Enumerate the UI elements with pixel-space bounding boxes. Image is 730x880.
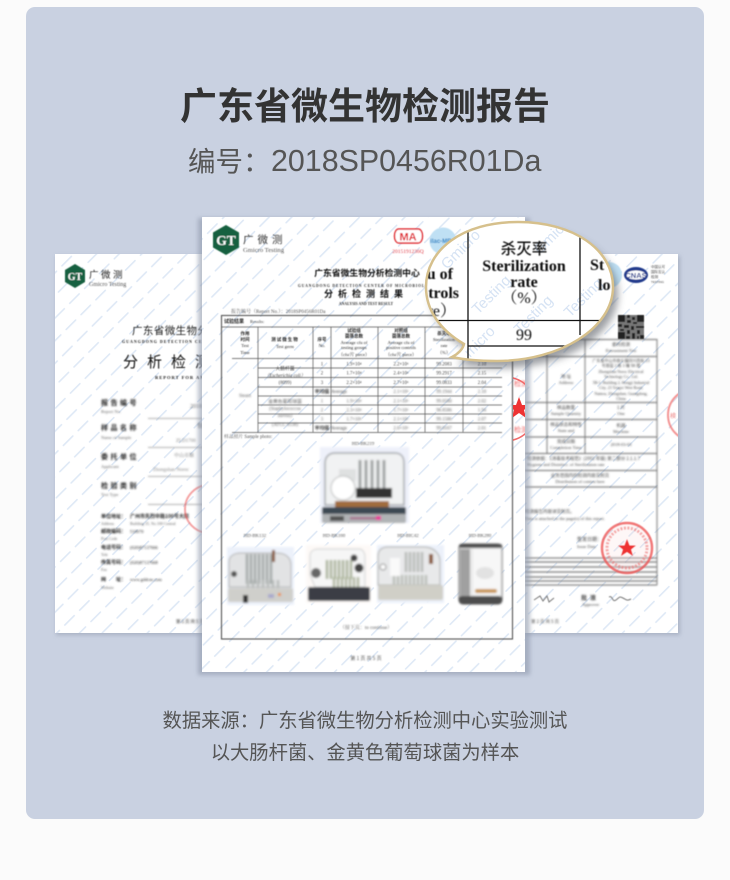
callout: magnified sterilization rate: micro bbox=[461, 323, 499, 361]
right page table: 广东省中山市南头镇同兴西街 23 bbox=[592, 357, 650, 364]
right page table: Address bbox=[559, 380, 574, 385]
report number: 报告编号（Report No.）：2018SP0456R01Da bbox=[231, 308, 326, 315]
report heading: GUANGDONG DETECTION CENTER OF MICROBIOLOGY bbox=[298, 284, 436, 288]
subtitle: report number: 编号： bbox=[188, 146, 270, 177]
results table: 作用 bbox=[240, 330, 250, 337]
left page form fields: 单位地址： bbox=[101, 513, 126, 520]
results table: 平均值 bbox=[315, 388, 329, 395]
results table: Sterilization bbox=[433, 337, 456, 342]
results table: 平均值 bbox=[315, 424, 329, 432]
callout: magnified sterilization rate: Testing bbox=[561, 275, 606, 321]
handwritten signatures bbox=[534, 596, 631, 602]
icon: left page logo: GT bbox=[68, 272, 83, 283]
left page form fields: 电话号码： bbox=[101, 544, 126, 551]
results table: 1.9×10⁴ bbox=[346, 362, 362, 368]
photo: dryer BK160 bbox=[306, 534, 371, 603]
left page form fields: 检验类别 bbox=[101, 481, 139, 491]
results table: （cfu/片 piece） bbox=[385, 351, 417, 358]
results table: 99.0167 bbox=[436, 426, 452, 432]
results table: 1.9×10⁴ bbox=[346, 398, 362, 404]
photo: main dish dryer: HD-BK219 bbox=[352, 442, 375, 447]
results table bbox=[222, 316, 512, 639]
left page form fields: 广州市先烈中路100号大院 bbox=[130, 513, 189, 520]
left page form fields: Zhongshan Noroc bbox=[153, 468, 190, 473]
right page table: 机器 bbox=[616, 422, 626, 429]
icon: CNAS badge: 中国认可 bbox=[651, 264, 665, 270]
results table: (Staphylococcus bbox=[269, 407, 301, 412]
left page form fields: Building 35, No.100 Central bbox=[130, 521, 177, 527]
right page table: 地 址 bbox=[561, 373, 572, 380]
results table: 3 bbox=[321, 381, 324, 386]
results table: 试验组 bbox=[347, 327, 361, 334]
results table: rate bbox=[441, 343, 447, 348]
left page logo text bbox=[89, 267, 126, 288]
photo: dryer BK160: HD-BK160 bbox=[323, 534, 346, 539]
results table: （%） bbox=[438, 350, 450, 355]
left page form fields: 样品名称 bbox=[101, 423, 139, 433]
right page table: 1 片 bbox=[617, 404, 625, 411]
results table: 时间 bbox=[240, 336, 250, 343]
photo: upright dryer BK280: HD-BK280 bbox=[469, 534, 492, 539]
results table: aureus) bbox=[278, 414, 293, 419]
results table: 1.7×10⁴ bbox=[346, 370, 362, 376]
right page table: State and bbox=[558, 428, 575, 433]
right page table: Hygiene and Disinfect. of Sterilization rate bbox=[527, 462, 604, 467]
logo text: Gmicro Testing bbox=[243, 247, 285, 254]
left page logo text: 广微测 bbox=[89, 267, 125, 281]
results table: Test germ bbox=[276, 344, 294, 349]
magnified neighbouring columns: trols bbox=[428, 285, 459, 302]
report heading: 分析检测结果 bbox=[324, 287, 408, 300]
data source note bbox=[163, 705, 567, 765]
report heading bbox=[298, 266, 436, 306]
results table: 序号 bbox=[318, 336, 327, 343]
left page form fields: Post Code bbox=[101, 536, 118, 541]
results table: 2.01 bbox=[478, 426, 487, 432]
left page form fields: 报告编号 bbox=[101, 398, 139, 408]
icon: Gmicro Testing logo bbox=[213, 225, 239, 255]
left page form fields: 餐 bbox=[197, 422, 203, 430]
results table: 测试微生物 bbox=[271, 336, 299, 343]
left page form fields: ZLD1700 bbox=[176, 439, 196, 444]
results table: 99.0833 bbox=[436, 381, 452, 386]
results table: 菌落总数 bbox=[345, 332, 363, 340]
left page heading: 分析检测 bbox=[123, 351, 219, 372]
right page table: 5B-1, Building 2, Hongji Industrial bbox=[593, 380, 650, 386]
results table: (8099) bbox=[279, 381, 292, 386]
results table: Average cfu of bbox=[341, 340, 368, 345]
red stamp at page edge: 检测 bbox=[514, 379, 528, 389]
icon: ilac badge bbox=[608, 262, 622, 287]
results table: 2.07 bbox=[478, 418, 487, 422]
panel: left report page bbox=[54, 254, 202, 636]
red stamp at page edge: 检测 bbox=[514, 425, 528, 435]
results table: Test bbox=[241, 343, 249, 348]
results table: (ATCC 6538) bbox=[272, 423, 299, 428]
left page form fields: 传真号码： bbox=[101, 559, 126, 566]
left page form fields: 2018 bbox=[190, 404, 202, 410]
results table: 金黄色葡萄球菌 bbox=[268, 398, 302, 405]
results table: 1 bbox=[321, 400, 324, 404]
right page table: 2018-03-03 bbox=[610, 442, 632, 447]
icon: left page logo bbox=[65, 264, 85, 288]
results table: 菌落总数 bbox=[392, 332, 410, 340]
results table: 2.7×10⁶ bbox=[393, 380, 409, 386]
results table: Average bbox=[331, 426, 347, 432]
left page form fields: www.gddcm.com bbox=[130, 577, 162, 582]
results table: testing groups bbox=[341, 345, 367, 350]
results table: 99.1586 bbox=[436, 418, 452, 422]
right page table: Issue Date bbox=[577, 544, 596, 549]
results table: Average bbox=[331, 390, 347, 395]
page note and page number: 第 1 页 共 5 页 bbox=[350, 655, 382, 662]
results table: 99.2917 bbox=[436, 372, 452, 376]
left page form fields: 委托单位 bbox=[101, 452, 139, 462]
icon: CMA mark: 2015191236Q bbox=[392, 249, 424, 255]
photo: dryer BK132 bbox=[227, 534, 294, 605]
results table: （Escherichia coli） bbox=[265, 372, 305, 379]
right page table: 号首层 2 栋 1 幢 5B 楼 bbox=[602, 362, 640, 369]
callout: magnified sterilization rate: Testing bbox=[511, 292, 556, 338]
results table: 1.94 bbox=[478, 408, 487, 414]
partial red stamp at edge: 検 bbox=[670, 411, 676, 420]
icon: CNAS badge: CNAS bbox=[625, 271, 647, 280]
left page red stamp bbox=[184, 484, 202, 534]
photo: upright dryer BK280 bbox=[459, 534, 502, 604]
results table: 2.2×10⁴ bbox=[346, 380, 362, 386]
results table: 2.1×10⁶ bbox=[393, 398, 409, 404]
photo: dryer BIC42 bbox=[377, 534, 444, 603]
title: 广东省微生物检测报告 bbox=[180, 76, 550, 130]
results table: 2.1×10⁶ bbox=[393, 416, 409, 422]
results table: 2.02 bbox=[478, 400, 487, 404]
left page form fields: Website bbox=[101, 585, 114, 590]
right page table: City, 23 Tongxi West Road, bbox=[599, 385, 643, 391]
left page form fields: Name of Sample bbox=[101, 435, 131, 440]
left page form fields: Fax bbox=[101, 567, 107, 572]
results table: 试验结果 bbox=[224, 318, 244, 325]
left page heading: GUANGDONG DETECTION CENTER bbox=[122, 339, 218, 344]
right page table: China bbox=[616, 396, 626, 401]
subtitle: report number: 2018SP0456R01Da bbox=[271, 144, 541, 178]
magnified column header: rate bbox=[510, 274, 538, 291]
left page heading: 广东省微生物分析检测中心 bbox=[132, 323, 263, 338]
icon: CNAS badge bbox=[624, 264, 665, 284]
magnified neighbouring columns: re） bbox=[428, 303, 456, 320]
photo: dryer BIC42: HD-BIC42 bbox=[397, 534, 419, 539]
icon: CMA mark: MA bbox=[399, 232, 417, 244]
right page table: 样品状态和特性 bbox=[550, 421, 582, 428]
results table: 对照组 bbox=[394, 327, 408, 334]
results table: 杀灭率 bbox=[437, 330, 451, 337]
report heading: 广东省微生物分析检测中心 bbox=[314, 266, 420, 279]
right page table: 检测报告内容详见附页。 bbox=[525, 508, 574, 515]
icon: CMA mark bbox=[392, 229, 424, 255]
icon: Gmicro Testing logo: GT bbox=[216, 233, 236, 248]
magnified neighbouring columns: St bbox=[590, 257, 605, 274]
results table: 2 bbox=[321, 372, 324, 376]
magnified column header: 杀灭率 bbox=[501, 237, 547, 259]
callout: magnified sterilization rate: Gmicro bbox=[531, 212, 577, 258]
right page table: 第 2 页 共 5 页 bbox=[531, 618, 560, 625]
left page form fields: Tele bbox=[101, 552, 108, 557]
left page form fields: Test Type bbox=[101, 492, 118, 497]
results table: 99.1944 bbox=[436, 390, 452, 395]
results table: 2.1×10⁶ bbox=[393, 389, 409, 395]
right page table: Data is attached to the page(s) of this report. bbox=[525, 516, 605, 521]
callout: magnified sterilization rate bbox=[420, 212, 620, 368]
left page form fields: 邮政编码： bbox=[101, 528, 126, 535]
left page form fields: Address bbox=[101, 521, 115, 526]
magnified neighbouring columns: u of bbox=[427, 266, 454, 283]
magnified column header bbox=[482, 237, 566, 344]
results table: 样品照片 Sample photo: bbox=[224, 433, 272, 440]
results table: No. bbox=[319, 343, 325, 348]
left page logo text: Gmicro Testing bbox=[89, 282, 126, 288]
icon: ilac-MRA mark: ilac-MRA bbox=[430, 239, 457, 245]
data source note: 以大肠杆菌、金黄色葡萄球菌为样本 bbox=[211, 737, 519, 765]
photo: main dish dryer bbox=[320, 442, 409, 523]
right page table: Entrustment Test bbox=[606, 348, 637, 353]
magnified column header: （%） bbox=[501, 290, 547, 307]
results table: 98.8586 bbox=[436, 408, 452, 414]
right page table: Nantou, Zhongshan, Guangdong, bbox=[594, 391, 648, 397]
left page form fields: (020)87137666 bbox=[130, 545, 158, 550]
icon: CNAS badge: 国际互认 bbox=[651, 269, 665, 275]
callout: magnified sterilization rate: Testing bbox=[469, 272, 514, 318]
results table: （cfu/片 piece） bbox=[338, 351, 370, 358]
results table: 2.10 bbox=[478, 390, 487, 395]
results table: 2.4×10⁶ bbox=[393, 370, 409, 376]
right page table: 业务范围内的检测内容见附页 bbox=[551, 472, 610, 479]
page note and page number bbox=[340, 624, 392, 662]
results table: Results: bbox=[250, 319, 265, 324]
results table: 1 bbox=[321, 362, 324, 368]
panel: centre report page bbox=[198, 217, 537, 675]
results table: Average cfu of bbox=[388, 340, 415, 345]
right page table: Technology Co., Ltd. bbox=[604, 374, 638, 380]
logo text: 广微测 bbox=[243, 232, 286, 247]
magnified neighbouring columns: lo bbox=[598, 277, 610, 294]
icon: ilac-MRA mark bbox=[430, 228, 457, 254]
panel: right report page bbox=[525, 254, 682, 636]
icon: QR code bbox=[618, 315, 644, 339]
logo text bbox=[243, 232, 286, 254]
left page form fields: 510070 bbox=[130, 529, 144, 534]
results table: Time bbox=[240, 350, 250, 355]
right page table: Completion Time bbox=[550, 445, 582, 450]
results table: 1.7×10⁴ bbox=[346, 416, 362, 422]
partial red stamp at edge bbox=[666, 392, 678, 438]
right page table: 样品数量 bbox=[557, 404, 575, 411]
results table: 2.10 bbox=[478, 362, 487, 368]
left page heading: REPORT FOR ANALYSIS bbox=[155, 375, 226, 380]
report heading: ANALYSIS AND TEST RESULT bbox=[339, 302, 394, 306]
left page form fields: (020)87137668 bbox=[130, 560, 158, 565]
icon: CNAS badge: TESTING bbox=[651, 280, 665, 284]
right page table: 完成日期 bbox=[557, 438, 575, 445]
icon: CNAS badge: 检测 bbox=[651, 274, 658, 280]
results table: 3 bbox=[321, 418, 324, 422]
right page table: One bbox=[617, 411, 625, 416]
red stamp with star bbox=[602, 523, 652, 573]
magnified neighbouring columns bbox=[427, 257, 610, 320]
left page form fields: 网 址： bbox=[101, 576, 126, 583]
results table: 2.0×10⁶ bbox=[393, 426, 409, 432]
results table: 2.2×10⁶ bbox=[393, 362, 409, 368]
right page table: 委托检测 bbox=[612, 341, 630, 348]
results table: 99.2083 bbox=[436, 362, 452, 368]
results table: positive controls bbox=[386, 345, 416, 350]
left page heading bbox=[121, 324, 202, 380]
right page table: 检测依据：《消毒技术规范》(2002 年版) 第二部分 2.1.1.7 bbox=[527, 455, 641, 462]
photo: dryer BK132: HD-BK132 bbox=[244, 534, 267, 539]
results table: 99.0580 bbox=[436, 400, 452, 404]
left page form fields: Report No. bbox=[101, 409, 121, 414]
results table: 1.7×10⁶ bbox=[393, 408, 409, 414]
page note and page number: （接下页：to continue） bbox=[340, 624, 392, 631]
magnified column header: Sterilization bbox=[482, 258, 566, 275]
left page form fields bbox=[101, 398, 205, 625]
magnified column header: 99 bbox=[516, 327, 532, 344]
left page form fields: 第 1 页 共 5 页 bbox=[176, 618, 205, 625]
right page table: Sample Quantity bbox=[551, 411, 582, 416]
right page table: Zhongshan Noroc Electrical bbox=[598, 369, 644, 374]
right page table: Distribution of contest here bbox=[555, 479, 605, 484]
table lines bbox=[438, 232, 600, 358]
data source note: 数据来源：广东省微生物分析检测中心实验测试 bbox=[163, 705, 567, 733]
results table: 2 bbox=[321, 408, 324, 414]
results table: Steam bbox=[239, 394, 251, 399]
right page table bbox=[525, 339, 657, 625]
results table: 2.3×10⁴ bbox=[346, 408, 362, 414]
results table: 大肠杆菌 bbox=[275, 365, 295, 372]
callout: magnified sterilization rate: Gmicro bbox=[438, 227, 484, 273]
left page form fields: Applicant bbox=[101, 464, 119, 469]
results table: 2.04 bbox=[478, 381, 487, 386]
right page table: 批准 bbox=[581, 593, 599, 602]
left page form fields: 中山市顺 bbox=[174, 452, 195, 459]
right page table: Machine bbox=[613, 429, 629, 434]
right page table: Approver bbox=[582, 602, 600, 607]
right page table: 签发日期： bbox=[577, 536, 602, 543]
results table: 2.15 bbox=[478, 372, 487, 376]
red stamp at page edge bbox=[513, 377, 525, 441]
